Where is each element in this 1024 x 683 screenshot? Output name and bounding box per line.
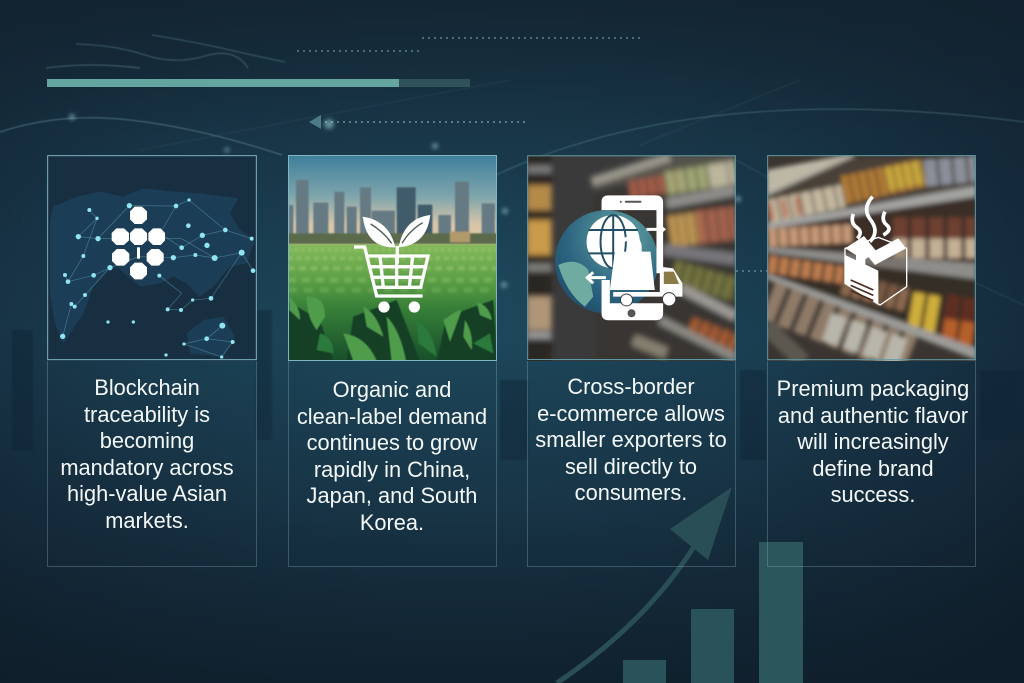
icon: shopping cart with leaves bbox=[354, 215, 430, 313]
caption: blockchain traceability: Blockchain bbox=[94, 375, 200, 400]
caption: premium packaging: will increasingly bbox=[797, 429, 949, 454]
panel: premium packaging bbox=[767, 155, 976, 567]
caption: organic demand: rapidly in China, bbox=[314, 457, 470, 482]
caption: cross-border e-commerce: Cross-border bbox=[567, 374, 695, 399]
caption: blockchain traceability bbox=[60, 375, 234, 533]
caption: organic demand: Korea. bbox=[360, 510, 424, 535]
caption: blockchain traceability: becoming bbox=[100, 428, 194, 453]
caption: organic demand: clean-label demand bbox=[297, 404, 487, 429]
caption: organic demand: continues to grow bbox=[307, 430, 477, 455]
caption: blockchain traceability: markets. bbox=[105, 508, 189, 533]
caption: premium packaging: Premium packaging bbox=[777, 376, 969, 401]
image: network map with blockchain icon bbox=[47, 155, 257, 361]
image: blurred store shelf with e-commerce icon bbox=[527, 155, 736, 361]
caption: premium packaging bbox=[777, 376, 969, 507]
caption: cross-border e-commerce: consumers. bbox=[575, 480, 687, 505]
caption: premium packaging: success. bbox=[831, 482, 915, 507]
caption: organic demand bbox=[297, 377, 487, 535]
caption: cross-border e-commerce bbox=[535, 374, 727, 505]
caption: cross-border e-commerce: e-commerce allows bbox=[537, 401, 725, 426]
image: green field and city with cart icon bbox=[288, 155, 497, 361]
panel: cross-border e-commerce bbox=[527, 155, 736, 567]
caption: organic demand: Organic and bbox=[333, 377, 451, 402]
caption: organic demand: Japan, and South bbox=[307, 483, 477, 508]
image: blurred bottle shelves with package icon bbox=[767, 155, 976, 361]
caption: cross-border e-commerce: sell directly to bbox=[565, 454, 697, 479]
icon: globe, phone, shopping bag and truck bbox=[555, 195, 682, 320]
arrow: dotted left arrow head bbox=[309, 115, 321, 129]
panel: blockchain traceability bbox=[47, 155, 257, 567]
caption: cross-border e-commerce: smaller exporters to bbox=[535, 427, 727, 452]
panel: organic demand bbox=[288, 155, 497, 567]
caption: blockchain traceability: high-value Asian bbox=[67, 481, 227, 506]
caption: premium packaging: and authentic flavor bbox=[778, 403, 968, 428]
caption: premium packaging: define brand bbox=[812, 456, 934, 481]
icon: blockchain hexagons bbox=[112, 207, 165, 279]
growth arrow and bars bbox=[557, 487, 803, 683]
progress bar bbox=[47, 79, 470, 87]
caption: blockchain traceability: traceability is bbox=[84, 402, 210, 427]
icon: steaming package box bbox=[845, 197, 907, 305]
caption: blockchain traceability: mandatory across bbox=[60, 455, 234, 480]
